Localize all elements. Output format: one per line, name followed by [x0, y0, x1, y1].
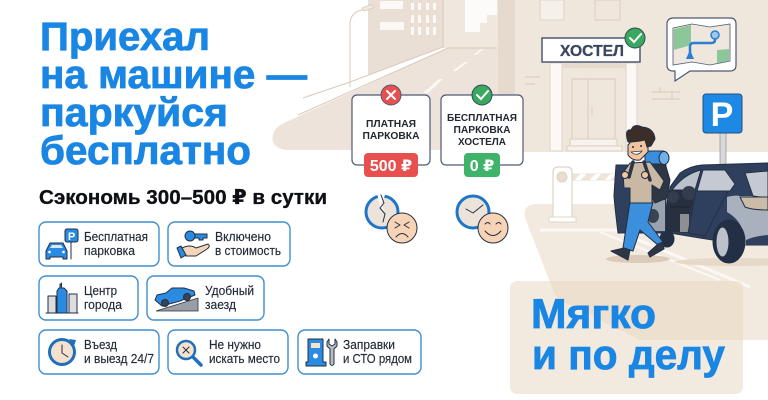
hostel sign: ХОСТЕЛ: [560, 43, 624, 60]
slogan: и по делу: [532, 331, 726, 378]
parking sign: P: [711, 96, 733, 134]
feature: city centre: города: [84, 298, 122, 312]
comparison card: free hostel parking: ПАРКОВКА: [454, 124, 511, 136]
feature: free parking: P: [68, 231, 75, 243]
feature: included in price: [168, 222, 290, 266]
feature: included in price: Включено: [215, 230, 271, 244]
feature: no need to search: искать место: [209, 352, 280, 366]
feature: 24/7 access: Въезд: [84, 338, 118, 352]
feature: free parking: Бесплатная: [84, 230, 148, 244]
comparison card: free hostel parking: 0 ₽: [470, 158, 494, 175]
feature: fuel and service nearby: и СТО рядом: [343, 352, 412, 366]
background street scene: [272, 0, 768, 340]
comparison card: free hostel parking: [441, 85, 523, 177]
hostel entrance: [550, 62, 637, 151]
subtitle: Сэкономь 300–500 ₽ в сутки: [39, 187, 327, 209]
feature: no need to search: Не нужно: [209, 338, 261, 352]
slogan: [531, 290, 726, 378]
feature: free parking: парковка: [84, 244, 135, 258]
feature: fuel and service nearby: [298, 330, 421, 374]
feature: free parking: [39, 222, 159, 266]
comparison card: paid parking: [352, 85, 430, 177]
feature: convenient access: Удобный: [205, 284, 254, 298]
feature: convenient access: [147, 276, 264, 320]
comparison card: free hostel parking: ХОСТЕЛА: [458, 136, 506, 148]
title: [40, 15, 307, 173]
icon: calm clock and happy face: [457, 196, 508, 243]
parking sign: [703, 94, 742, 168]
title: бесплатно: [40, 129, 251, 173]
comparison card: free hostel parking: БЕСПЛАТНАЯ: [447, 112, 517, 124]
title: паркуйся: [40, 91, 228, 135]
feature: fuel and service nearby: Заправки: [343, 338, 395, 352]
feature: 24/7 access: [39, 330, 159, 374]
map speech bubble: [667, 18, 736, 81]
comparison card: paid parking: 500 ₽: [370, 158, 412, 175]
title: Приехал: [40, 15, 210, 59]
comparison card: paid parking: ПЛАТНАЯ: [366, 118, 416, 130]
feature: 24/7 access: и выезд 24/7: [84, 352, 154, 366]
feature: city centre: Центр: [84, 284, 117, 298]
soft bottom panel: [510, 281, 743, 394]
parked car with open door: [614, 163, 768, 266]
title: на машине —: [40, 53, 307, 97]
feature: included in price: в стоимость: [215, 244, 281, 258]
icon: broken clock and angry face: [366, 193, 417, 243]
slogan: Мягко: [531, 290, 656, 337]
feature: convenient access: заезд: [205, 298, 237, 312]
barrier: [549, 167, 618, 222]
hostel sign: [542, 28, 645, 62]
feature: city centre: [39, 276, 138, 320]
traveller with backpack: [606, 126, 670, 263]
feature: no need to search: [168, 330, 288, 374]
comparison card: paid parking: ПАРКОВКА: [362, 130, 420, 142]
